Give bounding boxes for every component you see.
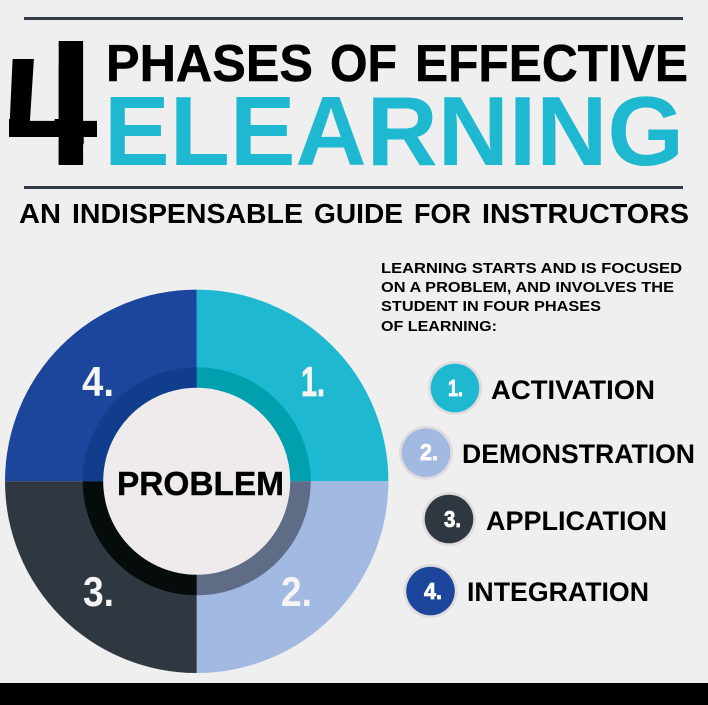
intro text block <box>381 261 682 335</box>
intro text block: STUDENT IN FOUR PHASES <box>381 299 601 315</box>
legend item 4: integration <box>404 564 649 618</box>
intro text block: ON A PROBLEM, AND INVOLVES THE <box>381 280 674 296</box>
segment 4: integration <box>5 290 197 481</box>
subtitle: AN <box>19 198 61 229</box>
title line: phases of effective: OF <box>330 34 397 92</box>
big numeral 4 <box>9 41 97 165</box>
big numeral 4: 4 <box>0 5 98 206</box>
legend item 4: integration: INTEGRATION <box>467 577 649 607</box>
title line: phases of effective <box>106 34 688 92</box>
donut chart: four phases around the problem <box>5 290 388 673</box>
legend item 1: activation: 1. <box>448 375 463 401</box>
legend item 3: application: 3. <box>444 506 461 532</box>
title line: phases of effective: EFFECTIVE <box>415 34 688 92</box>
title line: phases of effective: PHASES <box>106 34 313 92</box>
number 3: 3. <box>83 568 114 615</box>
subtitle: FOR <box>414 198 471 229</box>
subtitle: INDISPENSABLE <box>72 198 303 229</box>
title line: elearning: ELEARNING <box>104 76 684 186</box>
segment 2: demonstration <box>197 481 388 673</box>
legend item 2: demonstration: 2. <box>420 439 438 465</box>
legend item 3: application: APPLICATION <box>486 506 667 536</box>
inner ring <box>83 367 311 595</box>
subtitle <box>19 198 689 229</box>
legend item 2: demonstration: DEMONSTRATION <box>462 439 695 469</box>
legend item 1: activation <box>428 361 655 415</box>
segment 1: activation <box>197 290 388 481</box>
segment 3: application <box>5 481 197 673</box>
centre circle <box>103 388 290 575</box>
legend item 4: integration: 4. <box>424 578 442 604</box>
intro text block: LEARNING STARTS AND IS FOCUSED <box>381 261 682 277</box>
subtitle: INSTRUCTORS <box>482 198 689 229</box>
centre label: PROBLEM <box>117 466 284 503</box>
intro text block: OF LEARNING: <box>381 319 497 335</box>
footer bar <box>0 683 708 705</box>
subtitle: GUIDE <box>314 198 403 229</box>
legend item 3: application <box>422 492 667 546</box>
number 4: 4. <box>82 358 114 405</box>
legend item 1: activation: ACTIVATION <box>491 375 655 405</box>
number 1: 1. <box>301 358 325 405</box>
number 2: 2. <box>281 568 312 615</box>
legend item 2: demonstration <box>399 426 695 480</box>
